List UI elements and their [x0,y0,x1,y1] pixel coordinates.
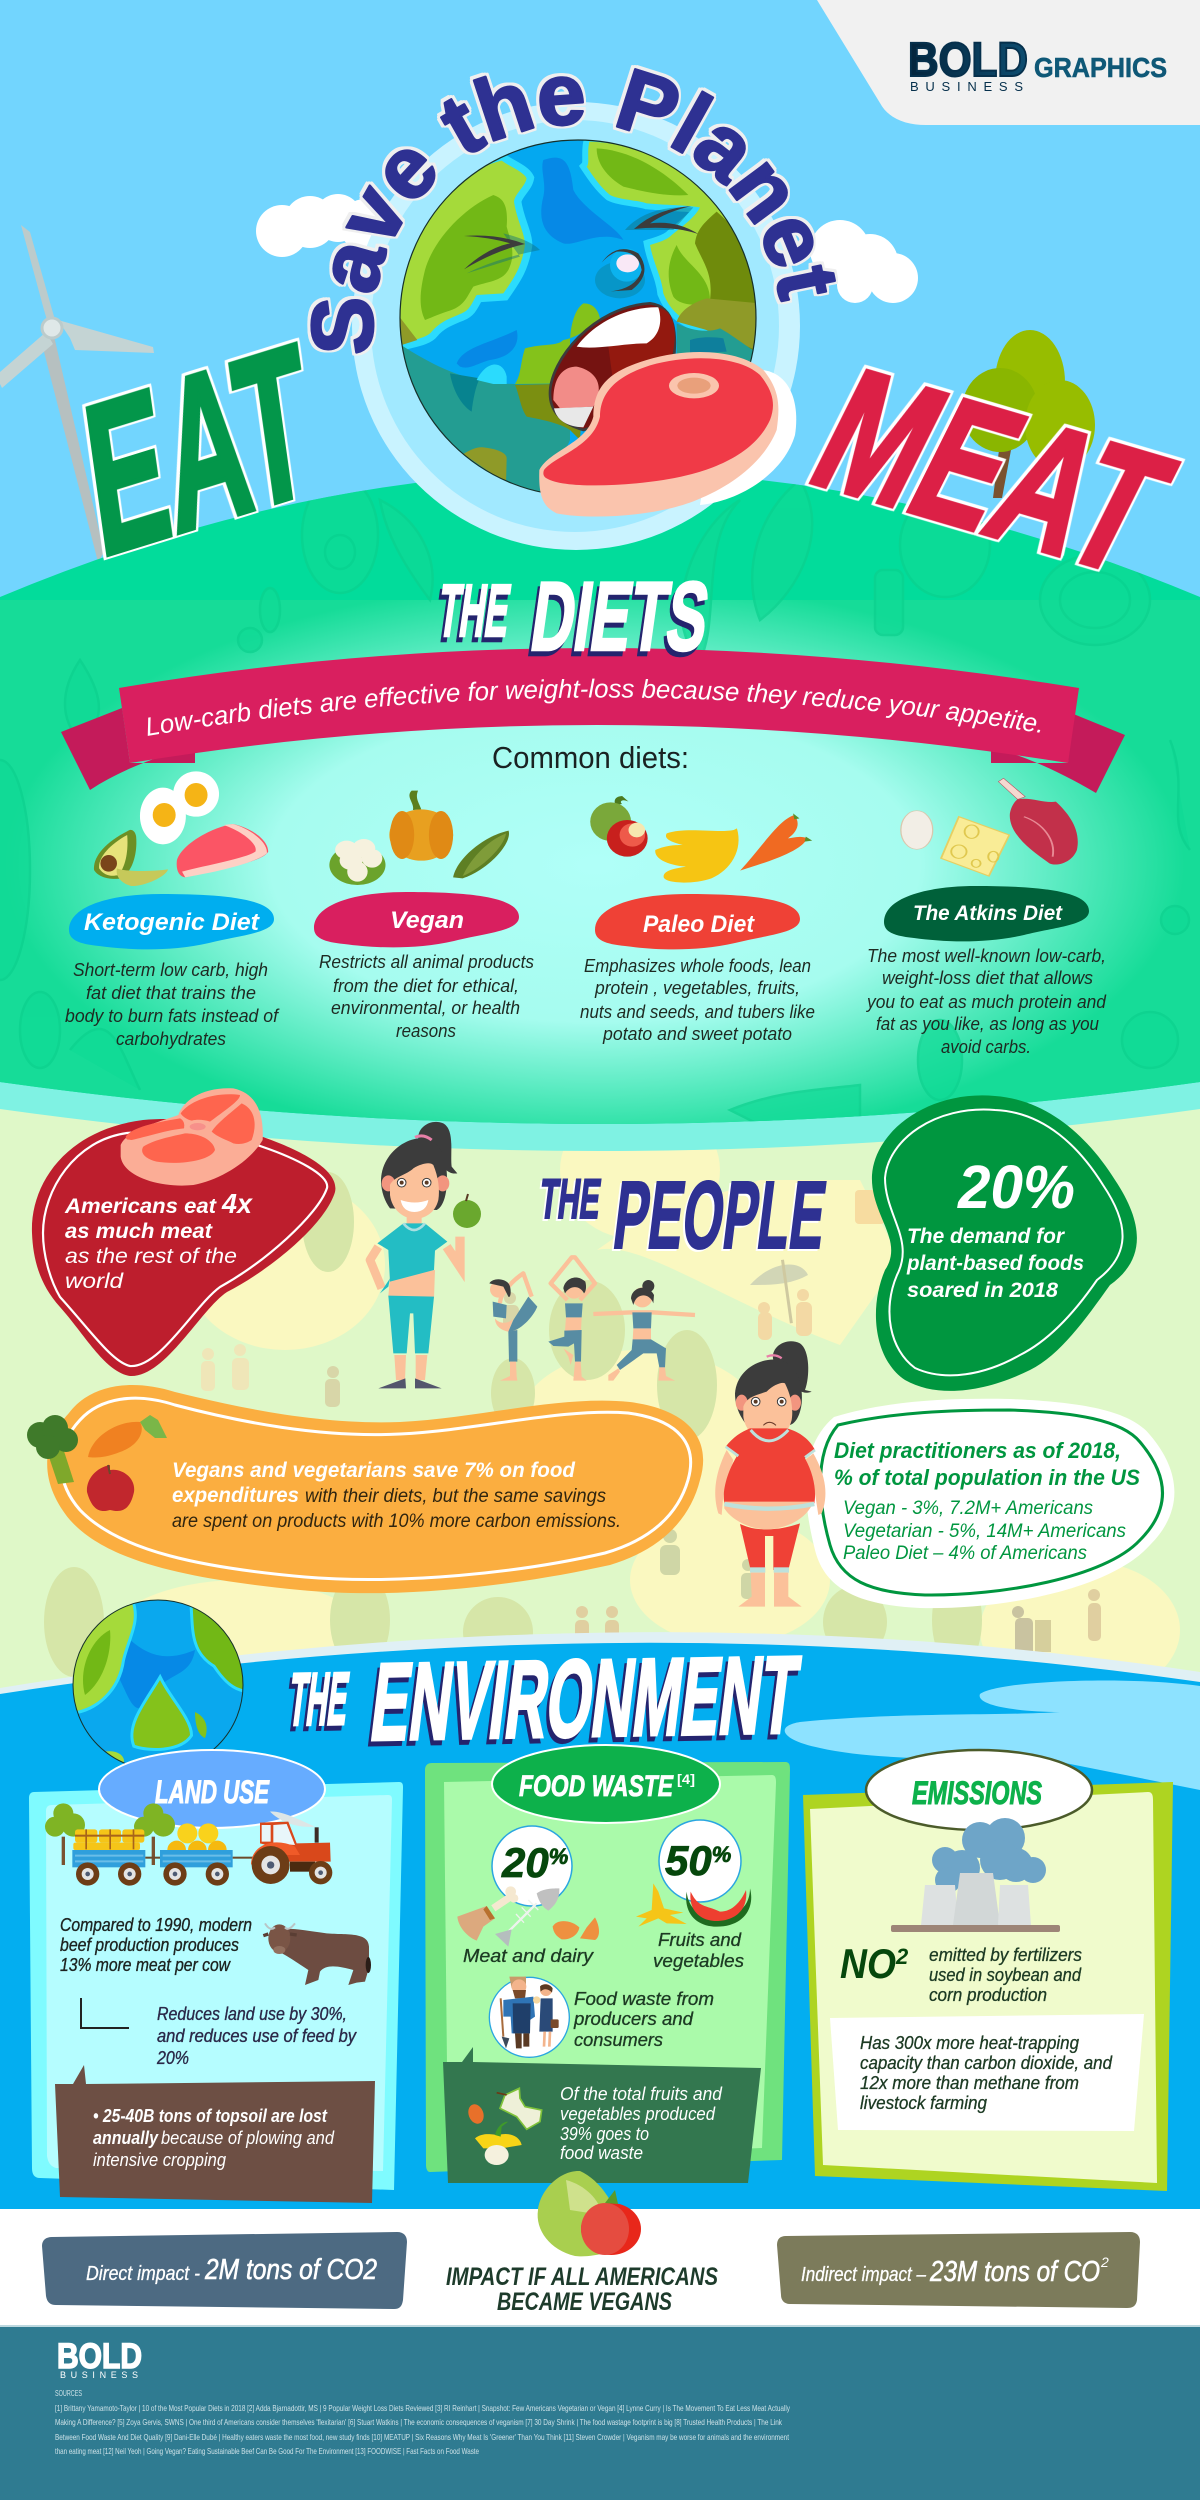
pill [492,1745,720,1823]
heading: The People: THE [537,1167,604,1230]
diet pill [595,894,800,949]
description [65,960,280,1049]
callout text [834,1438,1140,1564]
panel: Vegan: Vegan [390,907,464,934]
heading: impact if all Americans became vegans [446,2263,718,2316]
stat: indirect impact: 2 [1100,2254,1109,2270]
icon: tractor and trailers [45,1803,332,1886]
description: from the diet for ethical, [333,976,519,996]
icon: yoga figures [489,1257,695,1381]
callout text [172,1459,621,1532]
description: Short-term low carb, high [73,960,268,980]
callout text: with their diets, but the same savings [305,1486,606,1507]
callout text: world [65,1270,125,1293]
icon: tree [962,330,1095,498]
globe halo [352,102,800,550]
panel: Ketogenic Diet [65,771,280,1049]
sources: than eating meat [12] Neil Yeoh | Going Vegan? Eating Sustainable Beef Can Be Good For The Environment [13] FOODWISE | Fast Facts on Food Waste [55,2447,479,2456]
logo panel: Bold Business Graphics [817,0,1200,125]
description: potato and sweet potato [602,1024,792,1044]
text: land use reduction: and reduces use of feed by [157,2026,357,2046]
figure 3 [593,1280,695,1381]
heading: Common diets: Common diets: [492,740,689,775]
stat: indirect impact: 23M tons of CO [929,2256,1100,2288]
description: fat diet that trains the [86,983,256,1003]
labels: stat categories: vegetables [653,1951,744,1971]
callout: 20% plant-based demand [872,1095,1137,1391]
text: beef production: 13% more meat per cow [60,1955,231,1975]
heading: The Diets: DIETS [525,561,715,671]
icon: right cloud [810,220,918,303]
people section background [0,1075,1200,1725]
labels: stat categories: Fruits and [658,1930,742,1950]
figure 1 [489,1273,537,1381]
heading: The Environment [285,1634,805,1764]
description [865,946,1107,1057]
icon: peppers, bananas and carrots [590,796,812,883]
callout: heat trapping: Has 300x more heat-trapping [860,2033,1079,2053]
sources [55,2389,791,2456]
icon: cabbage and tomato [538,2171,641,2256]
heading: impact if all Americans became vegans: BECAME VEGANS [497,2288,672,2316]
icon: wind turbine [0,225,154,562]
stat: indirect impact: Indirect impact – [801,2264,927,2286]
text: food waste sources [573,1989,714,2050]
icon: apple [453,1194,481,1228]
callout text: The demand for [907,1225,1066,1248]
stat circle: 50%: 50 [665,1837,712,1884]
pill [99,1750,325,1828]
stat: indirect impact [777,2232,1140,2308]
stat circle: 20%: % [549,1844,568,1869]
callout text: Vegetarian - 5%, 14M+ Americans [843,1521,1126,1542]
face: mouth [550,303,675,430]
callout text: Vegan - 3%, 7.2M+ Americans [843,1498,1093,1519]
stat circle: 20%: 20 [502,1839,549,1886]
text: beef production [60,1915,252,1975]
description: environmental, or health [331,998,520,1018]
text: food waste sources: consumers [574,2030,663,2050]
footer logo: BUSINESS [60,2370,138,2380]
text: beef production: beef production produces [60,1935,239,1955]
callout text: % of total population in the US [834,1465,1140,1490]
icon: farmer family [489,1977,569,2057]
icon: small globe [72,1600,244,1764]
description: reasons [396,1021,456,1041]
callout text: Paleo Diet – 4% of Americans [843,1543,1087,1564]
sources: Between Food Waste And Diet Quality [9] Dani-Elle Dubé | Healthy eaters waste the most food, new study finds [10] MEATUP | Six Reasons Why Meat Is 'Greener' Than You Think [11] Steven Crowder | Veganism may be worse for animals and the environment [55,2433,790,2442]
icon: power plant [891,1818,1060,1932]
callout: heat trapping: 12x more than methane from [860,2073,1079,2093]
callout: topsoil: • 25-40B tons of topsoil are lost [93,2106,328,2126]
callout text: are spent on products with 10% more carbon emissions. [172,1511,621,1532]
callout: topsoil: intensive cropping [93,2150,226,2170]
text: fertilizers: used in soybean and [929,1965,1082,1985]
icon: steak [121,1088,263,1186]
callout: topsoil: because of plowing and [161,2128,335,2148]
logo panel: Bold Business Graphics: BOLD [908,34,1028,87]
icon: egg, cheese and meat [901,778,1078,876]
callout: Americans eat 4x [32,1088,335,1376]
diet pill [69,894,274,949]
callout: topsoil [55,2065,375,2203]
sources: [1] Brittany Yamamoto-Taylor | 10 of the Most Popular Diets in 2018 [2] Adda Bjarnadottir, MS | 9 Popular Weight Loss Diets Reviewed [3] RI Reinhart | Snapshot: Few Americans Vegetarian or Vegan [4] Lynne Curry | Is The Movement To Eat Less Meat Actually [55,2404,791,2413]
stat: NO2: NO [840,1940,896,1987]
heading: The People [537,1162,832,1269]
panel: diets section hill [0,471,1200,1140]
doodle pattern [0,477,1190,1125]
panel: Emissions [803,1750,1173,2191]
panel: Land Use [29,1750,403,2203]
background: sky [0,0,1200,640]
callout: heat trapping: livestock farming [860,2093,987,2113]
callout: food expenditures [27,1385,703,1593]
stat: direct impact [42,2232,407,2309]
heading: The Diets [434,561,715,671]
icon: earth eating steak [352,102,800,550]
description: nuts and seeds, and tubers like [580,1002,815,1022]
callout text: plant-based foods [906,1252,1084,1275]
labels: stat categories [463,1930,744,1971]
text: fertilizers: corn production [929,1985,1047,2005]
callout text [906,1225,1084,1302]
text: land use reduction: 20% [156,2048,189,2068]
icon: pumpkin, cauliflower and cucumber [329,791,509,885]
figure 2 [548,1257,595,1381]
diet pill [314,892,519,947]
description: fat as you like, as long as you [876,1014,1099,1034]
panel: Food Waste: [4] [677,1771,695,1787]
title: Save the Planet: Save the Planet [307,65,838,356]
stat circle: 20% [492,1826,572,1906]
ribbon text: Low-carb diets are effective for weight-loss because they reduce your appetite. [148,678,1040,736]
title: EAT: EAT [73,299,324,603]
icon: banana peel and watermelon [636,1883,751,1927]
icon: broccoli, carrot and apple [27,1415,167,1511]
white patch behind steak [700,370,796,505]
text: land use reduction [156,2004,357,2068]
diet pill [884,886,1089,941]
panel: vegan impact band [0,2171,1200,2326]
text: beef production: Compared to 1990, modern [60,1915,252,1935]
heading: The People: PEOPLE [608,1162,832,1269]
callout: topsoil: annually [93,2128,159,2148]
text: food waste sources: Food waste from [574,1989,714,2009]
callout: produce waste: vegetables produced [560,2104,716,2124]
face: eyes [467,233,540,273]
description [319,952,534,1041]
callout text [64,1188,253,1293]
description [580,956,815,1044]
stat superscript: 2 [895,1944,909,1969]
icon: broken reduce chart [81,1998,129,2028]
planet [400,140,756,492]
stat circle: 50%: % [712,1842,731,1867]
text: food waste sources: producers and [573,2009,694,2029]
icon: meat and dairy waste [457,1886,599,1947]
heading: The Environment: ENVIRONMENT [365,1634,805,1764]
icon: frowning woman [715,1341,825,1607]
icon: food scraps [466,2088,542,2165]
callout: produce waste [443,2047,761,2183]
description: you to eat as much protein and [865,992,1107,1012]
sources: Making A Difference? [5] Zoya Gervis, SWNS | One third of Americans consider themselves 'flexitarian' [6] Stuart Watkins | The economic consequences of veganism [7] 30 Day Shrink | The food wastage footprint is big [8] Trusted Health Products | The Link [55,2418,783,2427]
panel: Ketogenic Diet: Ketogenic Diet [84,909,260,936]
callout: heat trapping: capacity than carbon dioxide, and [860,2053,1113,2073]
stat: direct impact: Direct impact - [86,2263,200,2285]
panel: Food Waste: FOOD WASTE [519,1770,674,1803]
description: protein , vegetables, fruits, [594,978,800,998]
description: weight-loss diet that allows [882,968,1093,988]
pill [866,1750,1092,1830]
callout: diet practitioners [806,1399,1174,1608]
panel: The Atkins Diet: The Atkins Diet [913,902,1063,925]
panel: Food Waste [425,1745,790,2183]
callout text: as much meat [65,1220,213,1243]
panel: Vegan [314,791,534,1041]
icon: left cloud [256,194,406,257]
icon: eggs, avocado and steak [94,771,268,886]
logo panel: Bold Business Graphics: BUSINESS [910,79,1023,94]
callout text: soared in 2018 [907,1279,1058,1302]
panel: environment section background [0,1632,1200,2209]
callout text: as the rest of the [65,1245,237,1268]
footer logo: BOLD [57,2337,142,2376]
panel: Paleo Diet [580,796,815,1044]
logo panel: Bold Business Graphics: GRAPHICS [1034,52,1167,83]
callout: heat trapping [830,2014,1144,2131]
callout text: Americans eat [64,1195,217,1218]
description: body to burn fats instead of [65,1006,280,1026]
callout: produce waste: Of the total fruits and [560,2084,723,2104]
heading: The Diets: THE [434,569,515,652]
panel: Paleo Diet: Paleo Diet [643,911,755,938]
stat: direct impact: 2M tons of CO2 [204,2254,377,2286]
description: Restricts all animal products [319,952,534,972]
panel: Emissions: EMISSIONS [912,1775,1042,1811]
heading: The Environment: THE [285,1657,353,1741]
callout text: 4x [221,1188,253,1219]
icon: bull [263,1923,371,1985]
description: Emphasizes whole foods, lean [584,956,811,976]
steak [539,352,778,517]
panel: The Atkins Diet [865,778,1107,1057]
icon: fit woman [370,1122,460,1388]
description: avoid carbs. [941,1037,1031,1057]
callout: produce waste: 39% goes to [560,2124,649,2144]
text: fertilizers: emitted by fertilizers [929,1945,1082,1965]
callout text: Vegans and vegetarians save 7% on food [172,1459,576,1482]
panel: Land Use: LAND USE [155,1774,270,1810]
description: carbohydrates [116,1029,226,1049]
text: fertilizers [929,1945,1082,2005]
heading: impact if all Americans became vegans: IMPACT IF ALL AMERICANS [446,2263,718,2291]
sources: SOURCES [55,2389,82,2398]
callout text: Diet practitioners as of 2018, [834,1438,1121,1463]
ribbon banner [61,648,1125,793]
footer [0,2325,1200,2500]
description: The most well-known low-carb, [867,946,1106,966]
callout: produce waste: food waste [560,2143,643,2163]
callout text: expenditures [172,1484,299,1507]
cyan band under diets section [0,1060,1200,1151]
labels: stat categories: Meat and dairy [463,1946,594,1966]
stat: 20% [957,1153,1075,1221]
stat circle: 50% [659,1820,741,1902]
text: land use reduction: Reduces land use by 30%, [157,2004,347,2024]
